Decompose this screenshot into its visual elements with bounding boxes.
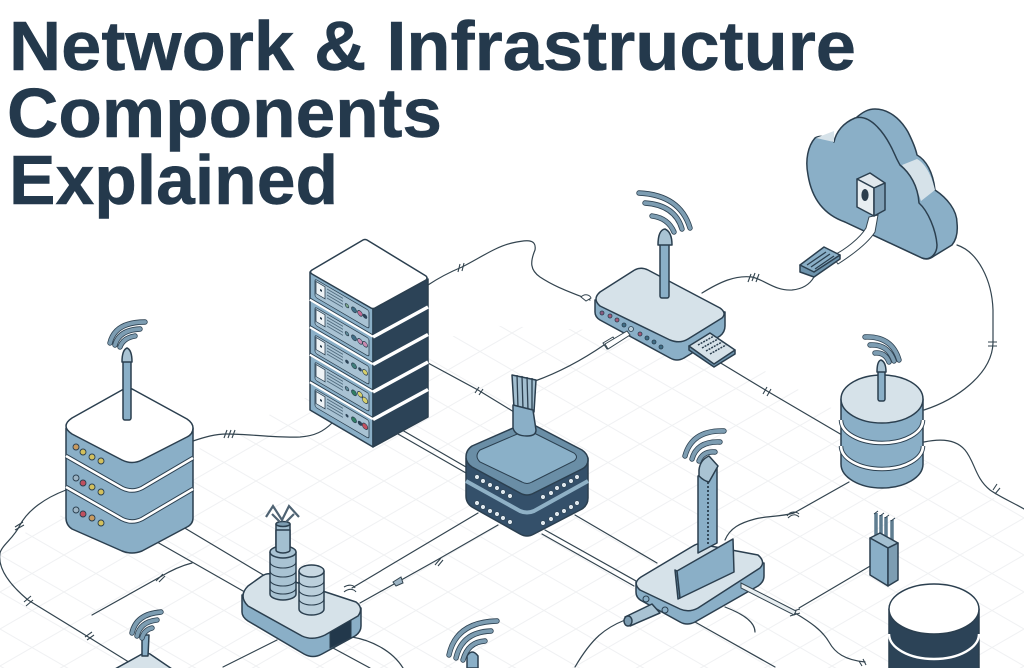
stack two	[299, 565, 324, 615]
icon: bottom centre wifi	[449, 621, 497, 660]
tower bands	[66, 456, 193, 522]
cylinder top	[841, 375, 923, 423]
rack right face	[373, 279, 428, 447]
rack top	[310, 240, 427, 308]
mast	[266, 506, 299, 553]
server unit 5	[315, 389, 369, 439]
switch top screen	[477, 431, 576, 484]
database top	[889, 584, 979, 634]
panel: central switch	[466, 375, 588, 536]
cylinder bands	[841, 420, 923, 469]
cloud back face	[845, 109, 957, 259]
panel: bottom left router	[115, 612, 172, 668]
base top	[243, 574, 361, 638]
lower antenna	[698, 456, 718, 553]
icon: router wifi	[639, 193, 690, 232]
panel: stacked base unit	[242, 506, 361, 656]
database band	[889, 634, 979, 659]
switch band	[466, 481, 588, 512]
base port	[330, 620, 351, 648]
title: Network & Infrastructure	[9, 7, 856, 85]
server unit 2	[315, 307, 369, 357]
network cables	[0, 241, 1024, 668]
icon: bottom left wifi	[132, 612, 161, 638]
router tube	[605, 331, 630, 349]
router lights	[600, 311, 663, 349]
server unit 4	[315, 362, 369, 412]
rack left face	[310, 272, 373, 447]
router card	[689, 333, 735, 367]
switch body	[466, 458, 588, 536]
panel: left wireless tower	[66, 322, 193, 553]
rack dividers	[373, 307, 428, 420]
stack one	[270, 530, 296, 600]
switch connector	[512, 375, 536, 436]
icon: tower wifi	[110, 322, 145, 347]
tower body	[66, 428, 193, 553]
title	[7, 7, 856, 219]
small device	[800, 247, 840, 277]
panel: small connector	[870, 511, 898, 586]
panel: lower switch with antenna	[624, 431, 796, 626]
panel: cloud	[800, 109, 957, 277]
tower antenna	[122, 348, 132, 420]
router top	[596, 268, 724, 342]
wall box	[857, 173, 885, 216]
router body	[595, 300, 725, 360]
cable to device	[832, 215, 878, 264]
server unit 3	[315, 335, 369, 385]
cylinder antenna	[877, 360, 886, 401]
base body	[242, 595, 361, 656]
panel: bottom centre antenna	[449, 621, 497, 668]
icon: cylinder wifi	[865, 337, 899, 362]
tower top	[66, 388, 193, 462]
title: Explained	[9, 141, 338, 219]
right tube	[741, 583, 796, 615]
icon: lower wifi	[685, 431, 724, 461]
cable clips	[15, 263, 1000, 666]
lower switch body	[636, 563, 764, 624]
switch ports	[475, 475, 579, 525]
cloud highlight	[902, 159, 935, 201]
cylinder body	[841, 399, 923, 488]
front panel	[675, 539, 734, 599]
panel: router	[595, 193, 735, 367]
panel: database cylinder	[841, 337, 923, 488]
router antenna	[658, 229, 672, 298]
title: Components	[7, 74, 442, 152]
tower status lights	[73, 444, 104, 526]
cloud front face	[807, 117, 937, 259]
switch top rim	[466, 423, 588, 495]
panel: server rack	[310, 240, 428, 447]
server unit 1	[315, 279, 369, 329]
lower switch top	[636, 544, 763, 611]
left tube	[624, 596, 668, 626]
panel: lower right database	[889, 584, 979, 668]
